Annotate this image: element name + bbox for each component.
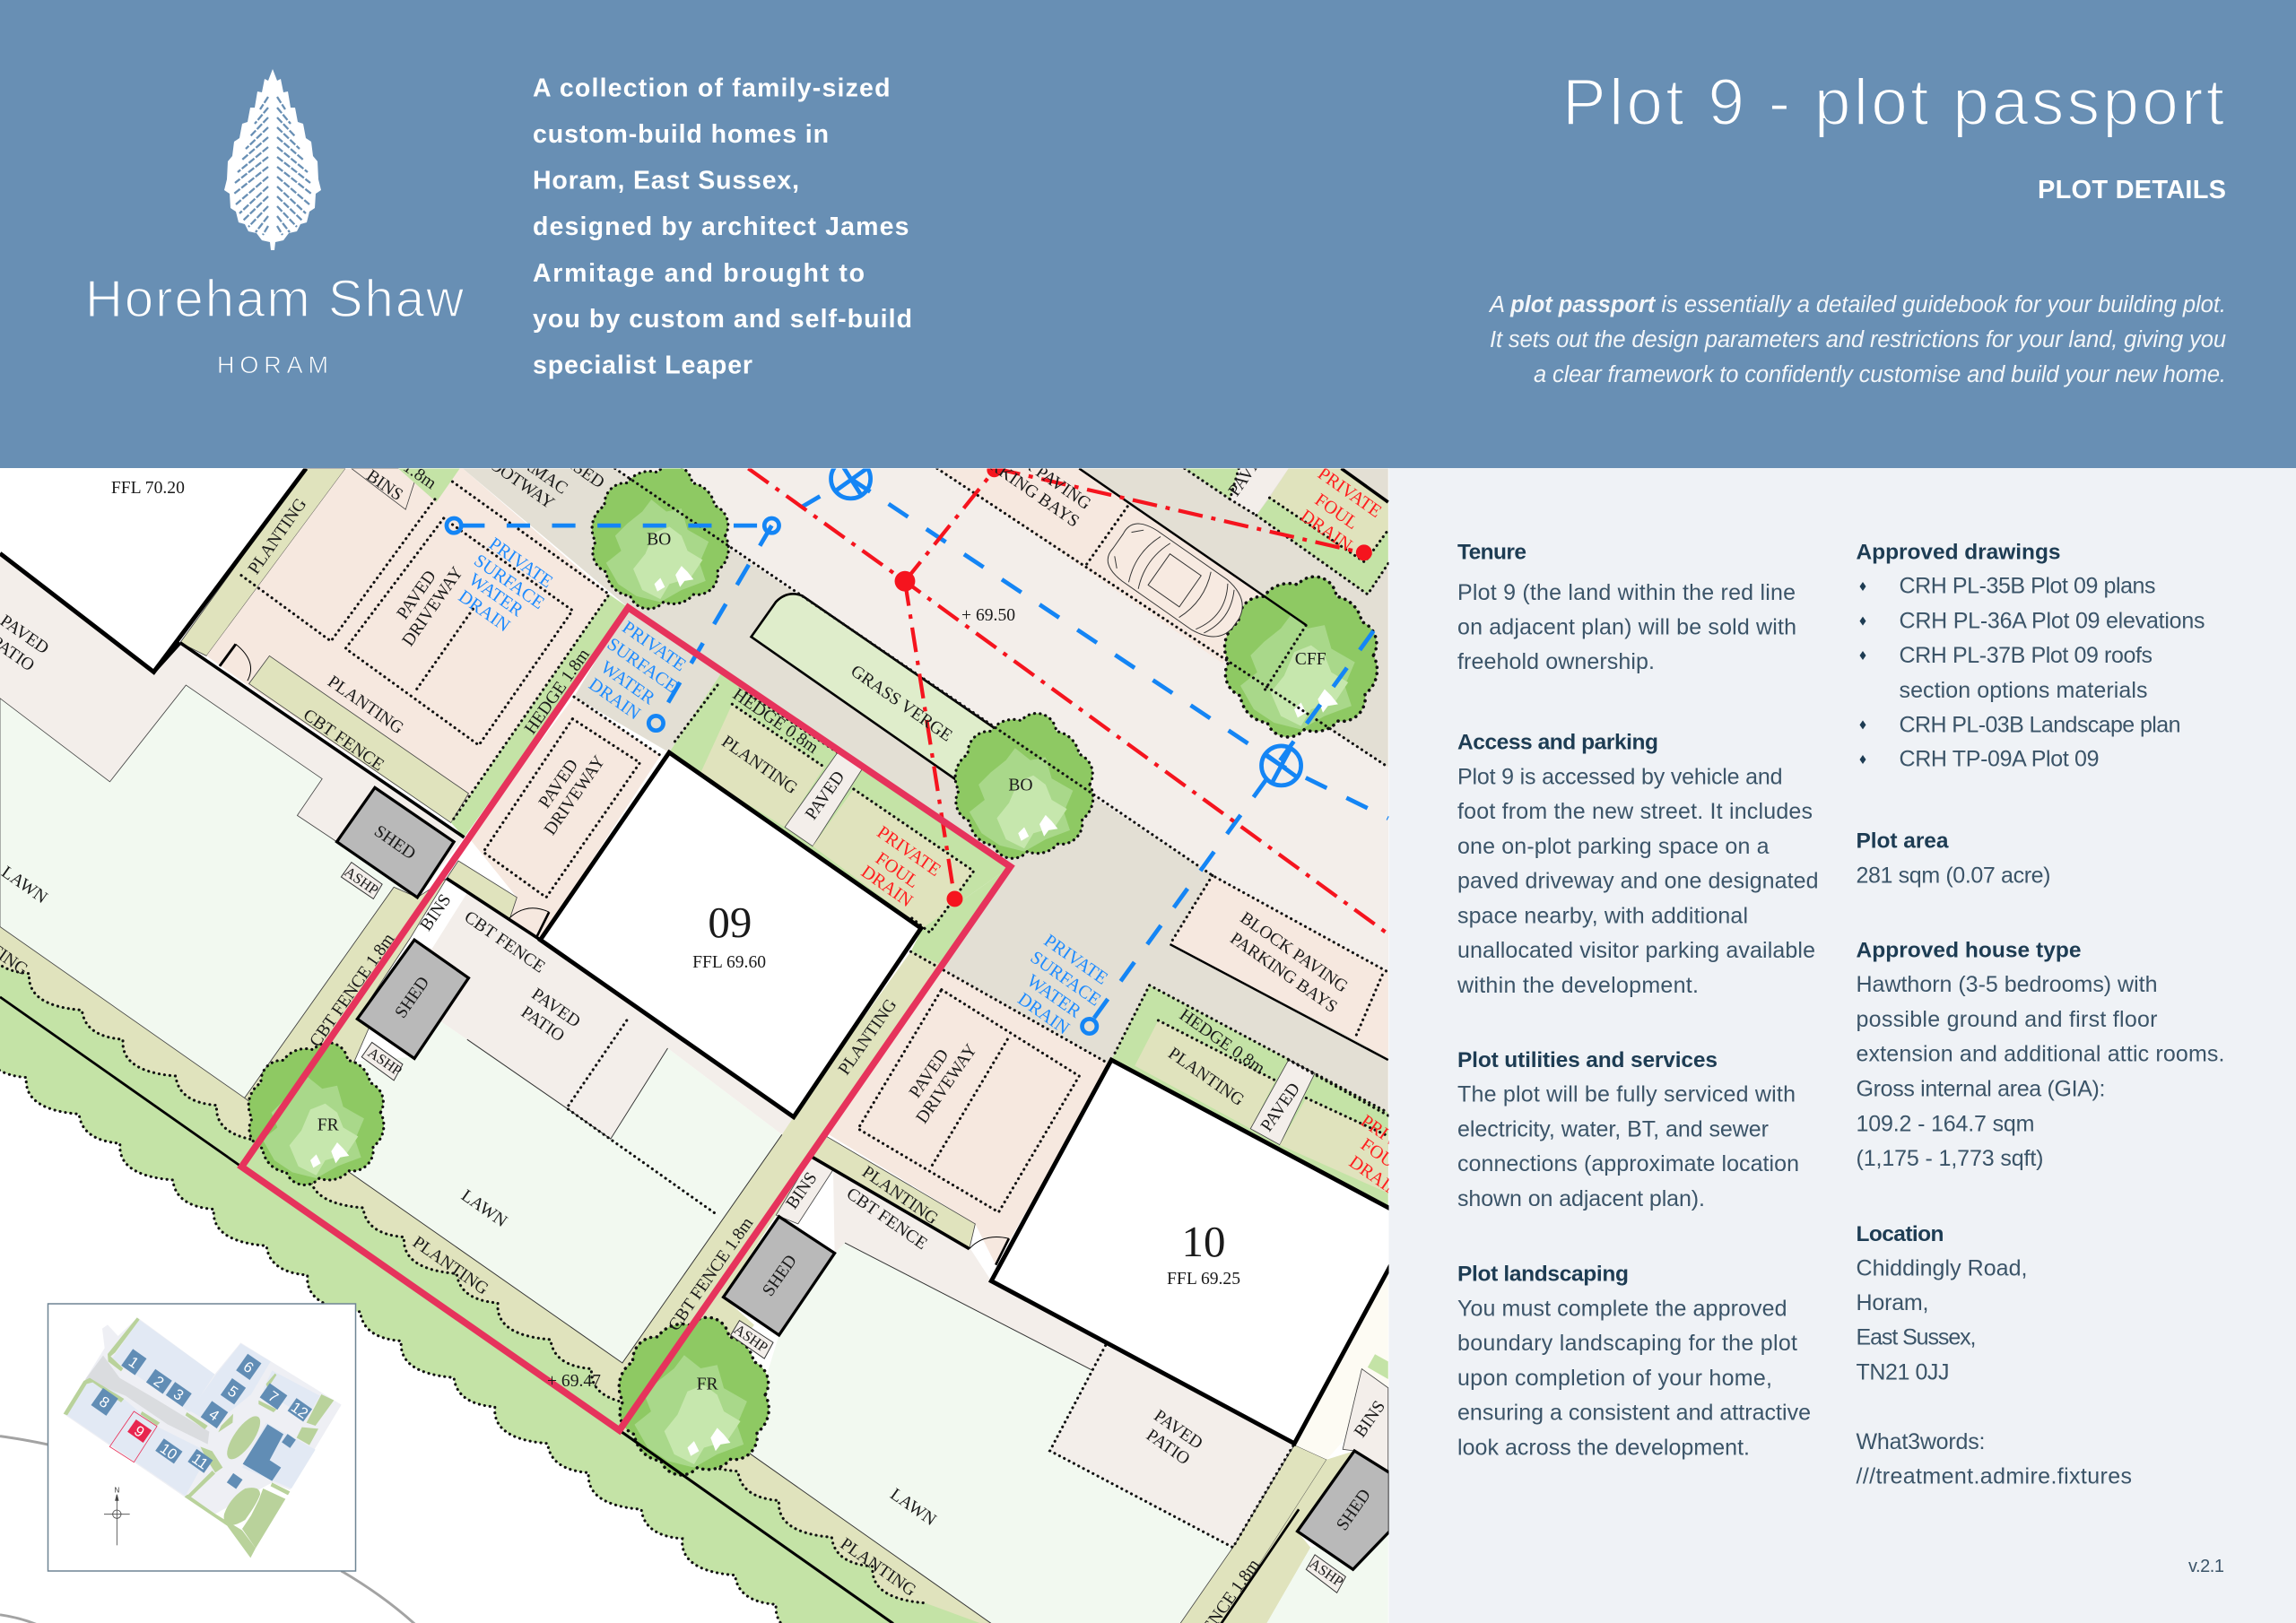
blue surface water drains bbox=[447, 459, 1388, 1034]
section: location: TN21 0JJ bbox=[1857, 1359, 1950, 1384]
section: tenure: Tenure bbox=[1457, 540, 1526, 564]
intro text: custom-build homes in bbox=[533, 120, 829, 149]
plan labels: BINS bbox=[417, 891, 455, 934]
section: tenure: on adjacent plan) will be sold with bbox=[1457, 615, 1796, 640]
section: location: Horam, bbox=[1857, 1290, 1928, 1315]
section: approved drawings: CRH PL-03B Landscape plan bbox=[1900, 712, 2181, 737]
icon: leaf logo bbox=[224, 69, 321, 250]
subheading: PLOT DETAILS bbox=[2038, 176, 2226, 204]
plan labels: FR bbox=[697, 1375, 718, 1393]
plan labels: PAVED bbox=[802, 768, 848, 823]
section: plot landscaping: ensuring a consistent and attractive bbox=[1457, 1401, 1811, 1426]
section: approved house type bbox=[1857, 938, 2224, 1171]
section: approved house type: Hawthorn (3-5 bedrooms) with bbox=[1857, 972, 2158, 997]
plot numbers: 1 bbox=[126, 1353, 142, 1372]
section: plot area: Plot area bbox=[1857, 829, 1949, 854]
section: access and parking: foot from the new street. It includes bbox=[1457, 799, 1813, 824]
plan labels: WATER bbox=[465, 569, 526, 621]
plan labels: BLOCK PAVING bbox=[1237, 908, 1351, 996]
plot 9 outline bbox=[109, 1411, 157, 1462]
section: approved house type: extension and additional attic rooms. bbox=[1857, 1042, 2224, 1067]
intro text: designed by architect James bbox=[533, 213, 909, 241]
door arcs bbox=[220, 644, 1009, 1265]
plan labels: ASHP bbox=[731, 1321, 771, 1356]
plan labels: ASHP bbox=[1307, 1555, 1347, 1590]
plan labels: GRASS VERGE bbox=[847, 662, 955, 746]
car outline bbox=[1107, 524, 1243, 637]
plan labels: 1.8m bbox=[400, 457, 439, 493]
plan labels: PAVED bbox=[906, 1046, 952, 1101]
section: approved house type: 109.2 - 164.7 sqm bbox=[1857, 1112, 2034, 1137]
plot numbers: 8 bbox=[96, 1393, 113, 1411]
section: location: Chiddingly Road, bbox=[1857, 1255, 2027, 1280]
section: plot utilities and services bbox=[1457, 1048, 1799, 1211]
plan labels: BO bbox=[1008, 777, 1033, 795]
plan labels: DRAIN bbox=[585, 674, 644, 724]
plan labels: DRAIN bbox=[1297, 506, 1356, 556]
plan labels: ASHP bbox=[342, 863, 382, 898]
plot number tiles bbox=[91, 1349, 312, 1473]
red foul drains bbox=[748, 468, 1388, 934]
plan labels: CBT FENCE bbox=[461, 907, 548, 977]
plan labels: ASHP bbox=[365, 1044, 405, 1080]
plan labels: SHED bbox=[759, 1252, 801, 1300]
header band bbox=[0, 0, 2296, 468]
plan labels: CBT FENCE 1.8m bbox=[307, 930, 398, 1051]
plan labels: PLANTING bbox=[1164, 1044, 1248, 1110]
tree: BO south bbox=[955, 714, 1093, 858]
section: approved drawings: CRH PL-35B Plot 09 plans bbox=[1900, 574, 2156, 599]
plan labels: FFL 69.60 bbox=[692, 953, 766, 972]
plan labels: FOOTWAY bbox=[478, 449, 558, 513]
plan labels: + 69.47 bbox=[547, 1372, 601, 1391]
plan labels: PAVED bbox=[1151, 1406, 1205, 1454]
house: plot 10 bbox=[991, 1060, 1394, 1444]
main building bbox=[227, 1424, 296, 1488]
section: approved drawings bbox=[1857, 540, 2205, 772]
details panel bbox=[1388, 468, 2296, 1623]
intro text: specialist Leaper bbox=[533, 352, 752, 380]
ground fills bbox=[0, 468, 1389, 1623]
plan labels: PRIVATE bbox=[1040, 931, 1111, 989]
plan labels: DRIVEWAY bbox=[913, 1041, 981, 1127]
plan labels: DRIVEWAY bbox=[399, 564, 467, 650]
section: approved drawings: CRH PL-37B Plot 09 roofs bbox=[1900, 643, 2152, 668]
shed and ASHP units bbox=[337, 787, 1389, 1593]
plot numbers: 9 bbox=[131, 1422, 148, 1441]
section: plot landscaping bbox=[1457, 1263, 1811, 1460]
plan labels: SHED bbox=[392, 974, 433, 1022]
section: tenure: Plot 9 (the land within the red line bbox=[1457, 580, 1796, 605]
plot passport description bbox=[1488, 292, 2226, 387]
plot numbers: 5 bbox=[224, 1383, 241, 1402]
logo wordmark bbox=[85, 270, 465, 378]
plan labels: PAVED bbox=[528, 985, 584, 1031]
tree: CFF bbox=[1225, 577, 1377, 737]
plan labels: WATER bbox=[1023, 971, 1084, 1022]
contour lines bbox=[0, 1436, 416, 1623]
plan labels: LAWN bbox=[887, 1485, 939, 1530]
plan labels: DRAIN bbox=[1345, 1152, 1405, 1202]
section: location: ///treatment.admire.fixtures bbox=[1857, 1463, 2132, 1488]
plan labels: LAWN bbox=[457, 1186, 510, 1231]
section: plot utilities and services: electricity, water, BT, and sewer bbox=[1457, 1117, 1769, 1142]
tree: FR east bbox=[619, 1317, 769, 1475]
plan labels: PLANTING bbox=[835, 996, 900, 1079]
section: plot landscaping: look across the development. bbox=[1457, 1435, 1750, 1460]
section: plot utilities and services: Plot utilities and services bbox=[1457, 1048, 1718, 1072]
section: location: What3words: bbox=[1857, 1429, 1986, 1454]
plan labels: PARKING BAYS bbox=[1226, 929, 1341, 1017]
intro text: Armitage and brought to bbox=[533, 259, 865, 288]
plan labels: DRAIN bbox=[455, 586, 514, 636]
plot numbers: 2 bbox=[151, 1373, 167, 1392]
intro text: Horam, East Sussex, bbox=[533, 167, 799, 195]
section: plot area: 281 sqm (0.07 acre) bbox=[1857, 863, 2050, 888]
plan labels: 09 bbox=[708, 898, 752, 947]
section: location: East Sussex, bbox=[1857, 1325, 1977, 1350]
plot numbers: 10 bbox=[157, 1440, 180, 1463]
section: tenure: freehold ownership. bbox=[1457, 649, 1655, 674]
section: access and parking: one on-plot parking space on a bbox=[1457, 834, 1770, 859]
section: access and parking: space nearby, with additional bbox=[1457, 904, 1748, 929]
plot numbers: 3 bbox=[170, 1385, 187, 1404]
plan labels: PAVED bbox=[1257, 1080, 1304, 1135]
plan labels: TARMAC bbox=[500, 440, 570, 499]
title: Plot 9 - plot passport bbox=[1562, 66, 2224, 139]
logo wordmark: HORAM bbox=[217, 352, 328, 378]
plan labels: HEDGE 1.8m bbox=[521, 646, 594, 738]
plan labels: 10 bbox=[1182, 1217, 1226, 1266]
key plan inset bbox=[48, 1304, 355, 1571]
plan labels: FFL 70.20 bbox=[111, 479, 185, 498]
plan labels: PLANTING bbox=[409, 1233, 491, 1298]
plan labels: PAVED bbox=[1225, 445, 1272, 499]
plot numbers: 7 bbox=[265, 1387, 282, 1406]
tree: FR west bbox=[248, 1043, 384, 1185]
red drain nodes bbox=[895, 463, 1372, 907]
logo wordmark: Horeham Shaw bbox=[85, 270, 465, 328]
plan labels bbox=[0, 426, 1428, 1623]
plan labels: BINS bbox=[1351, 1398, 1389, 1441]
section: location bbox=[1857, 1222, 2132, 1488]
plan labels: FR bbox=[317, 1115, 340, 1134]
plan labels: CBT FENCE bbox=[843, 1185, 930, 1254]
section: plot landscaping: You must complete the approved bbox=[1457, 1297, 1787, 1322]
section: plot utilities and services: connections (approximate location bbox=[1457, 1151, 1799, 1176]
plan labels: HEDGE 0.8m bbox=[729, 685, 822, 758]
site plan map bbox=[0, 426, 1428, 1623]
plan labels: PLANTING bbox=[718, 733, 801, 798]
plot numbers bbox=[96, 1353, 311, 1472]
section: approved drawings: CRH TP-09A Plot 09 bbox=[1900, 747, 2099, 772]
section: plot landscaping: Plot landscaping bbox=[1457, 1263, 1629, 1287]
plan labels: PLANTING bbox=[324, 673, 407, 738]
section: access and parking: within the development. bbox=[1457, 973, 1699, 998]
plan labels: PATIO bbox=[1143, 1426, 1193, 1469]
plan labels: PRIVATE bbox=[1357, 1111, 1428, 1169]
section: access and parking: Access and parking bbox=[1457, 731, 1658, 755]
dotted boundaries bbox=[237, 468, 1388, 1548]
plan labels: BINS bbox=[362, 466, 406, 505]
plan labels: CBT FENCE bbox=[300, 706, 387, 775]
plan labels: PLANTING bbox=[245, 495, 310, 577]
plan labels: SHED bbox=[370, 822, 419, 864]
plan labels: PLANTING bbox=[837, 1534, 919, 1601]
green spaces bbox=[64, 1317, 334, 1558]
section: plot utilities and services: The plot will be fully serviced with bbox=[1457, 1081, 1796, 1107]
plot numbers: 12 bbox=[288, 1399, 311, 1422]
plan labels: SURFACE bbox=[1027, 948, 1104, 1010]
section: approved drawings: section options materials bbox=[1900, 678, 2147, 703]
plan labels: PATIO bbox=[517, 1002, 568, 1046]
section: access and parking bbox=[1457, 731, 1819, 998]
version number: v.2.1 bbox=[2188, 1557, 2224, 1576]
section: plot utilities and services: shown on adjacent plan). bbox=[1457, 1186, 1705, 1211]
grass verge bbox=[750, 593, 994, 780]
tree: BO north bbox=[592, 465, 728, 609]
section: plot landscaping: boundary landscaping for the plot bbox=[1457, 1331, 1797, 1356]
intro text bbox=[533, 74, 912, 380]
fences and kerbs bbox=[0, 468, 1388, 1623]
shared road bbox=[85, 1356, 209, 1445]
plan labels: PAVED bbox=[394, 568, 440, 623]
house: plot 09 bbox=[540, 752, 921, 1117]
plan labels: RAISED bbox=[545, 440, 607, 492]
plan labels: BLOCK PAVING bbox=[979, 426, 1094, 514]
north arrow bbox=[104, 1486, 130, 1545]
plot passport description: A plot passport is essentially a detailed guidebook for your building plot. bbox=[1488, 292, 2226, 317]
plan labels: SURFACE bbox=[604, 634, 681, 697]
plot 9 red boundary bbox=[241, 608, 1011, 1430]
plan labels: DRIVEWAY bbox=[541, 752, 609, 838]
section: access and parking: unallocated visitor parking available bbox=[1457, 938, 1815, 963]
plan labels: + 69.50 bbox=[961, 606, 1015, 625]
plan labels: PARKING BAYS bbox=[969, 444, 1083, 532]
plan labels: PRIVATE bbox=[619, 618, 690, 675]
plan labels: PRIVATE bbox=[485, 534, 556, 592]
plan labels: DRAIN bbox=[857, 862, 917, 911]
section: plot area bbox=[1857, 829, 2050, 888]
section: approved house type: (1,175 - 1,773 sqft) bbox=[1857, 1146, 2043, 1171]
section: tenure bbox=[1457, 540, 1796, 674]
plan labels: PLANTING bbox=[858, 1163, 941, 1228]
plan labels: BO bbox=[647, 530, 671, 549]
wavy hedge outlines bbox=[0, 944, 926, 1623]
plot numbers: 11 bbox=[189, 1450, 212, 1472]
plan labels: FOUL bbox=[1311, 490, 1361, 534]
plan labels: PAVED bbox=[535, 756, 582, 812]
plan labels: HEDGE 0.8m bbox=[1176, 1006, 1268, 1078]
plan labels: CBT FENCE 1.8m bbox=[665, 1214, 757, 1334]
intro text: you by custom and self-build bbox=[533, 305, 912, 334]
plan labels: PRIVATE bbox=[1314, 464, 1385, 522]
section: approved house type: Gross internal area (GIA): bbox=[1857, 1076, 2106, 1101]
plan labels: FOUL bbox=[1357, 1134, 1407, 1178]
site base bbox=[65, 1317, 342, 1514]
plan labels: SURFACE bbox=[470, 551, 548, 613]
plan labels: WATER bbox=[597, 657, 658, 708]
plot areas bbox=[67, 1320, 320, 1496]
plot numbers: 6 bbox=[240, 1358, 257, 1376]
plan labels: DRAIN bbox=[1014, 989, 1073, 1038]
section: access and parking: Plot 9 is accessed by vehicle and bbox=[1457, 764, 1783, 789]
plan labels: CFF bbox=[1295, 650, 1326, 669]
section: access and parking: paved driveway and one designated bbox=[1457, 869, 1819, 894]
intro text: A collection of family-sized bbox=[533, 74, 890, 102]
north arrow: N bbox=[114, 1486, 119, 1494]
plan labels: FFL 69.25 bbox=[1167, 1270, 1240, 1289]
section: approved house type: Approved house type bbox=[1857, 938, 2081, 962]
section: approved drawings: Approved drawings bbox=[1857, 540, 2061, 564]
section: approved house type: possible ground and first floor bbox=[1857, 1007, 2158, 1032]
plan labels: PRIVATE bbox=[874, 822, 944, 881]
plot passport description: It sets out the design parameters and restrictions for your land, giving you bbox=[1490, 327, 2226, 352]
section: location: Location bbox=[1857, 1222, 1944, 1246]
section: plot landscaping: upon completion of your home, bbox=[1457, 1366, 1772, 1391]
plan labels: BINS bbox=[783, 1169, 822, 1212]
section: approved drawings: CRH PL-36A Plot 09 elevations bbox=[1900, 608, 2205, 633]
plot passport description: a clear framework to confidently customise and build your new home. bbox=[1534, 362, 2226, 387]
plan labels: FOUL bbox=[872, 848, 922, 892]
plot numbers: 4 bbox=[205, 1406, 222, 1425]
plan labels: SHED bbox=[1333, 1486, 1375, 1534]
